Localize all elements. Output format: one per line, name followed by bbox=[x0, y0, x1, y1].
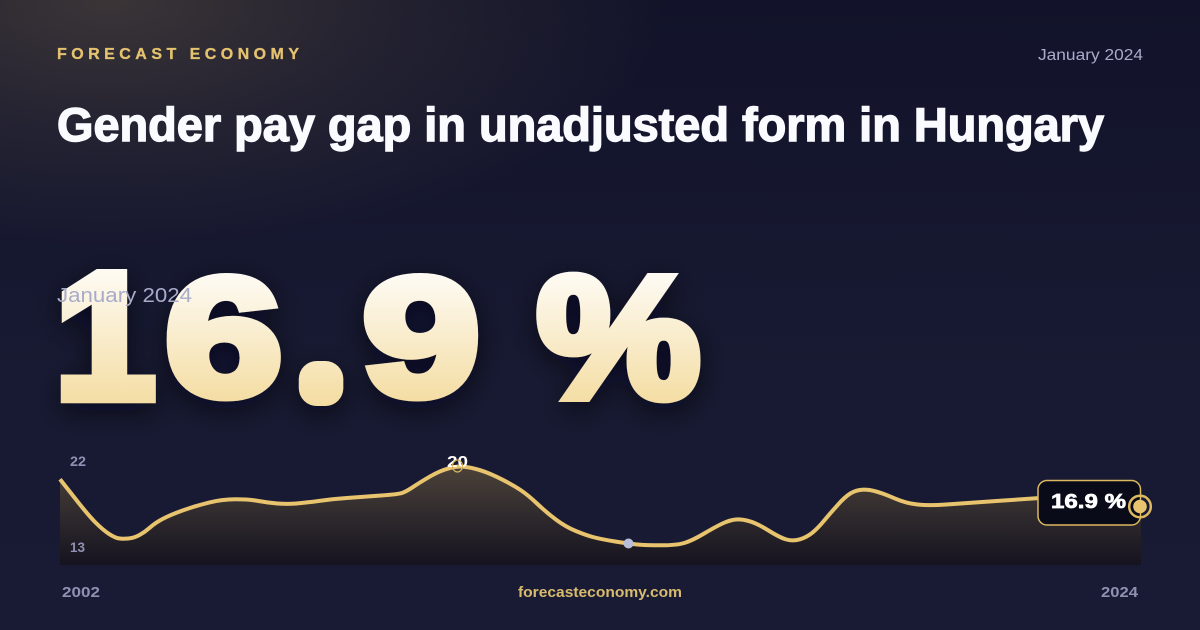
source url: forecasteconomy.com bbox=[518, 584, 682, 601]
y axis min: 13 bbox=[70, 539, 85, 555]
big value bbox=[55, 236, 700, 437]
date top right: January 2024 bbox=[1038, 47, 1143, 64]
value callout bbox=[1038, 480, 1140, 525]
x axis end year: 2024 bbox=[1101, 584, 1139, 601]
big value: % bbox=[537, 241, 700, 434]
low point marker bbox=[624, 538, 634, 548]
big value: 9 bbox=[362, 244, 480, 431]
x axis start year: 2002 bbox=[62, 584, 100, 601]
big value: 1 bbox=[55, 236, 156, 437]
title: Gender pay gap in unadjusted form in Hungary bbox=[57, 98, 1104, 151]
line chart bbox=[60, 453, 1151, 565]
trend line bbox=[60, 467, 1040, 545]
value callout: 16.9 % bbox=[1051, 491, 1126, 513]
end point marker bbox=[1129, 496, 1151, 517]
big value: . bbox=[313, 334, 329, 401]
peak marker bbox=[452, 460, 462, 472]
brand label: FORECAST ECONOMY bbox=[57, 46, 299, 63]
peak label: 20 bbox=[447, 454, 468, 471]
date overlay on value: January 2024 bbox=[57, 285, 192, 307]
area under curve bbox=[60, 467, 1141, 565]
y axis max: 22 bbox=[70, 453, 86, 469]
big value: 6 bbox=[165, 244, 282, 431]
